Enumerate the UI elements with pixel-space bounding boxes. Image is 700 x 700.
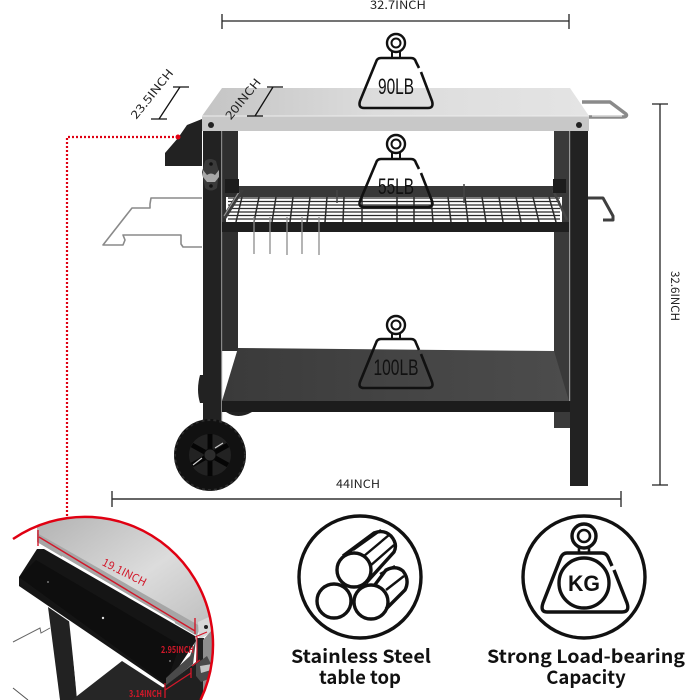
stainless steel table top xyxy=(202,88,589,131)
dimension: total width 44 inch xyxy=(112,476,621,507)
inset: side tray close-up: 3.14INCH xyxy=(129,686,162,700)
caption: strong load-bearing capacity xyxy=(487,643,685,690)
icon: KG weight capacity xyxy=(523,516,645,638)
dimension: top width 32.7 inch xyxy=(222,0,569,29)
weight icon: 100 lb xyxy=(360,316,432,388)
caption: stainless steel table top: Stainless Steel xyxy=(291,643,431,669)
inset: side tray close-up: 2.95INCH xyxy=(161,642,194,656)
caption: stainless steel table top xyxy=(291,643,431,690)
cart legs xyxy=(203,131,588,486)
handle: right towel bar xyxy=(582,102,626,117)
dimension: 23.5 inch depth: 23.5INCH xyxy=(127,66,177,122)
weight icon: 100 lb: 100LB xyxy=(374,355,418,380)
weight icon: 90 lb xyxy=(360,34,432,108)
dimension: total width 44 inch: 44INCH xyxy=(336,476,380,492)
weight icon: 55 lb xyxy=(360,135,432,207)
red dotted leader line xyxy=(67,134,180,516)
bottle opener on left leg xyxy=(202,159,219,190)
icon: KG weight capacity: KG xyxy=(568,571,600,596)
inset: side tray close-up: 19.1INCH xyxy=(99,554,149,590)
dimension: height 32.6 inch: 32.6INCH xyxy=(667,271,683,321)
side tray on left of cart xyxy=(165,119,202,166)
inset: side tray close-up xyxy=(12,516,214,700)
caption: strong load-bearing capacity: Capacity xyxy=(546,664,626,690)
dimension: 20 inch depth: 20INCH xyxy=(221,75,265,123)
dimension: 23.5 inch depth xyxy=(127,66,189,122)
rear wheel xyxy=(198,375,252,416)
front wheel xyxy=(174,419,246,491)
bottom shelf xyxy=(222,348,570,412)
caption: stainless steel table top: table top xyxy=(319,664,401,690)
weight icon: 55 lb: 55LB xyxy=(378,174,414,199)
icon: stainless steel tubes xyxy=(299,516,421,638)
weight icon: 90 lb: 90LB xyxy=(378,74,414,99)
caption: strong load-bearing capacity: Strong Load-bearing xyxy=(487,643,685,669)
left fold-out wire rack xyxy=(103,198,202,247)
right side hook xyxy=(588,198,613,220)
dimension: 20 inch depth xyxy=(221,75,283,123)
middle wire mesh shelf xyxy=(222,179,569,232)
hanging hooks xyxy=(254,217,319,255)
dimension: height 32.6 inch xyxy=(652,104,683,485)
